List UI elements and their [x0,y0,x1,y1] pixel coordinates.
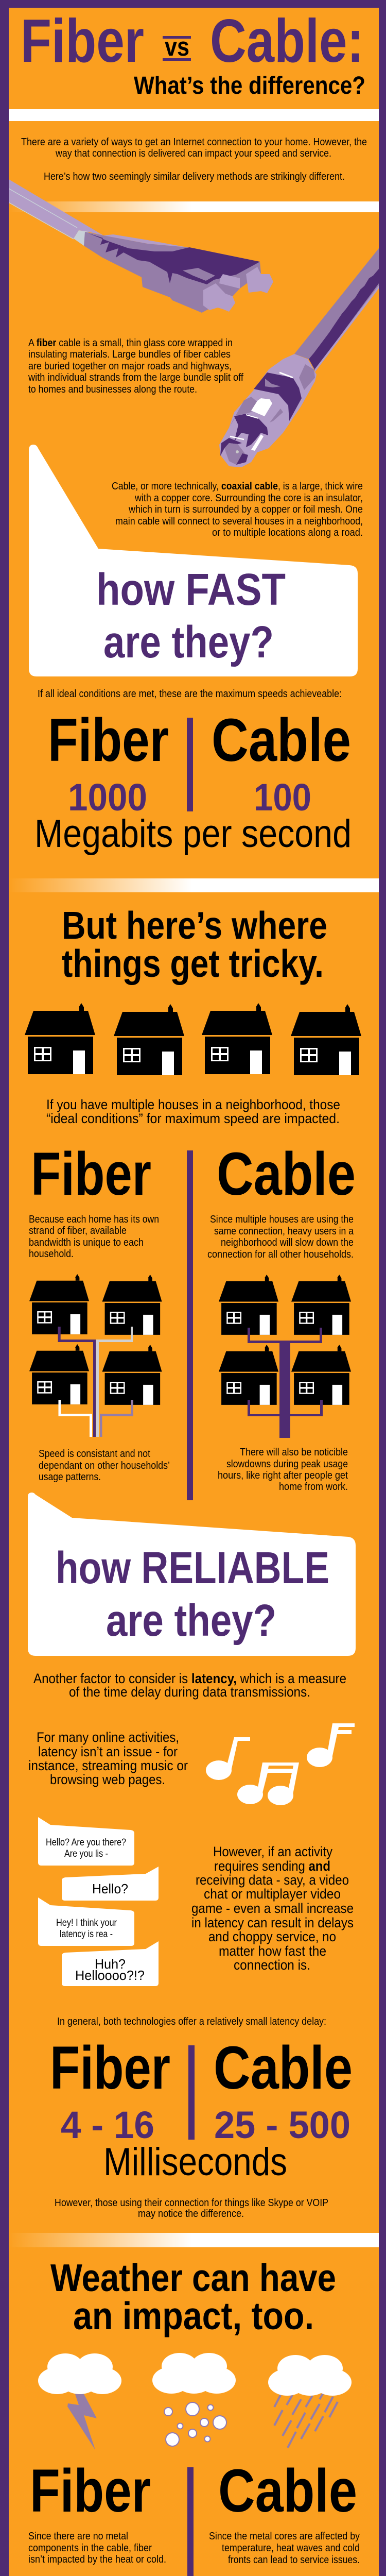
speed comparison [34,706,352,856]
text: fiber speed: dependant on other households’ [39,1460,170,1471]
number: 25-500: 25 - 500 [214,2104,350,2146]
latency intro: In general, both technologies offer a relatively small latency delay: [57,2016,326,2027]
text: fiber speed: usage patterns. [39,1471,101,1483]
divider [188,2045,195,2140]
fiber description: insulating materials. Large bundles of fiber cables [28,349,231,360]
streaming text [28,1730,188,1787]
gradient band [9,201,379,212]
heading: weather: Weather can have [50,2256,336,2299]
panel: fiber neighborhood [29,1140,170,1483]
number: 100: 100 [254,776,311,819]
text: metal cores: temperature, heat waves and cold [222,2543,360,2554]
gradient band [9,2233,379,2247]
fiber description [28,337,243,395]
bubble 1 [38,1817,134,1866]
title: Fiber: Fiber [21,7,144,75]
icon: music notes [206,1723,355,1805]
panel: fiber weather [9,2457,166,2576]
text: fiber speed: Speed is consistant and not [39,1448,150,1460]
text: metal cores: Since the metal cores are affected by [209,2531,360,2542]
label: fiber: Fiber [48,706,169,774]
coaxial description [112,481,363,538]
sending and receiving text: game - even a small increase [191,1901,354,1916]
text: fiber speed [39,1448,170,1483]
text: cable slowdowns: hours, like right after people get [218,1470,348,1481]
icon: hail cloud [152,2353,236,2446]
text: metal cores [209,2531,360,2566]
text: cable shared connection: Since multiple houses are using the [210,1214,354,1225]
label: fiber: Fiber [50,2034,170,2102]
heading: fiber: Fiber [31,1140,151,1208]
icons: four houses [219,1275,351,1405]
bubble 1: Are you lis - [64,1849,108,1859]
icon: fiber optic connector [9,179,273,313]
panel: cable neighborhood [207,1140,356,1493]
title block [21,7,365,99]
neighborhood text: “ideal conditions” for maximum speed are impacted. [46,1111,340,1126]
divider: weather comparison [187,2467,194,2576]
text: fiber bandwidth: strand of fiber, available [29,1225,127,1236]
bubble 4: Helloooo?!? [75,1968,145,1983]
text: fiber no metal [28,2531,166,2565]
label: cable: Cable [214,2034,353,2102]
sending and receiving text: requires sending and [214,1858,330,1874]
coaxial description: which in turn is surrounded by a copper or foil mesh. One [128,504,363,515]
icon: lightning cloud [38,2353,121,2450]
title: vs with bars: vs [165,32,189,61]
bubble 3: Hey! I think your [56,1918,117,1928]
ideal speeds intro: If all ideal conditions are met, these are the maximum speeds achieveable: [38,688,342,700]
heading: tricky: things get tricky. [62,942,324,985]
unit: Milliseconds [103,2140,287,2184]
chat bubbles [38,1817,159,1986]
white band [9,109,379,121]
diagram: individual fiber strands [58,1327,133,1437]
streaming text: latency isn’t an issue - for [38,1744,178,1759]
sending and receiving text: connection is. [234,1957,310,1973]
heading: fiber: Fiber [30,2457,151,2525]
coaxial description: or to multiple locations along a road. [212,527,363,538]
speech bubble: how reliable [28,1493,356,1656]
sending and receiving text: chat or multiplayer video [204,1886,341,1902]
heading: weather: an impact, too. [73,2294,314,2337]
bubble 4 [62,1941,159,1986]
fiber description: with individual strands from the large bundle split off [28,372,243,383]
bubble 2: Hello? [92,1881,128,1896]
sending and receiving text: and choppy service, no [208,1929,336,1944]
text: metal cores: fronts can lead to service issues. [228,2554,360,2566]
text: cable slowdowns [218,1447,348,1493]
sending and receiving text: receiving data - say, a video [196,1872,349,1888]
bubble 3: latency is rea - [60,1929,113,1940]
intro text: Here’s how two seemingly similar delivery methods are strikingly different. [44,171,345,182]
heading: how fast: how FAST [96,565,286,615]
latency definition [33,1671,346,1700]
fiber description: A fiber cable is a small, thin glass core wrapped in [28,337,233,349]
text: fiber bandwidth [29,1214,159,1260]
coaxial description: Cable, or more technically, coaxial cable, is a large, thick wire [112,481,363,492]
fiber description: to homes and businesses along the route. [28,384,197,395]
sending and receiving text: However, if an activity [213,1844,333,1859]
text: cable shared connection: neighborhood will slow down the [221,1237,354,1248]
latency definition: Another factor to consider is latency, which is a measure [33,1671,346,1686]
heading: cable: Cable [218,2457,357,2525]
panel: cable weather [209,2457,379,2576]
text: fiber bandwidth: Because each home has its own [29,1214,159,1225]
divider [187,718,193,811]
text: cable slowdowns: slowdowns during peak usage [226,1459,348,1470]
heading: are they: are they? [106,1596,276,1646]
icon: rain cloud [268,2355,352,2448]
sending and receiving text: matter how fast the [219,1943,326,1959]
text: fiber bandwidth: household. [29,1248,74,1260]
text: fiber no metal: components in the cable, fiber [28,2543,152,2554]
streaming text: instance, streaming music or [28,1758,188,1773]
sending and receiving text [191,1844,354,1973]
text: cable shared connection [207,1214,354,1260]
number: 4-16: 4 - 16 [61,2104,154,2146]
icons: row of four houses [25,1003,361,1075]
gradient band [9,878,379,892]
skype note [55,2197,328,2219]
icon: coaxial cable connector [219,248,379,467]
divider: neighborhood comparison [187,1150,193,1500]
bubble 1: Hello? Are you there? [46,1837,126,1848]
neighborhood text: If you have multiple houses in a neighborhood, those [46,1097,340,1112]
heading: tricky: But here’s where [62,904,327,947]
intro text: way that connection is delivered can impact your speed and service. [55,148,331,159]
text: cable slowdowns: There will also be noticible [240,1447,348,1458]
latency comparison [50,2034,353,2184]
neighborhood text [46,1097,340,1126]
streaming text: browsing web pages. [50,1772,165,1787]
text: fiber bandwidth: bandwidth is unique to each [29,1237,144,1248]
coaxial description: with a copper core. Surrounding the core is an insulator, [134,493,363,504]
coaxial description: main cable will connect to several houses in a neighborhood, [115,516,363,527]
label: cable: Cable [212,706,351,774]
heading: how reliable: how RELIABLE [56,1543,329,1593]
text: cable shared connection: same connection, heavy users in a [214,1226,354,1237]
sending and receiving text: in latency can result in delays [191,1915,354,1930]
text: cable shared connection: connection for all other households. [207,1249,354,1260]
heading: weather [50,2256,336,2337]
number: 1000: 1000 [68,776,147,819]
bubble 3 [38,1897,134,1946]
text: fiber no metal: isn’t impacted by the heat or cold. [28,2554,166,2565]
text: fiber no metal: Since there are no metal [28,2531,128,2542]
skype note: However, those using their connection for things like Skype or VOIP [55,2197,328,2209]
speech bubble: how fast [29,445,358,676]
heading: are they: are they? [103,617,274,667]
intro text [21,137,367,182]
diagram: shared cable trunk [248,1328,323,1438]
bubble 2 [62,1867,159,1901]
text: cable slowdowns: home from work. [279,1481,348,1493]
heading: tricky [62,904,327,985]
latency definition: of the time delay during data transmissions. [69,1684,310,1700]
fiber description: are buried together on major roads and highways, [28,361,232,372]
streaming text: For many online activities, [37,1730,179,1745]
icons: four houses [29,1274,162,1405]
skype note: may notice the difference. [138,2208,244,2219]
heading: cable: Cable [217,1140,356,1208]
bubble 4: Huh? [95,1956,126,1972]
